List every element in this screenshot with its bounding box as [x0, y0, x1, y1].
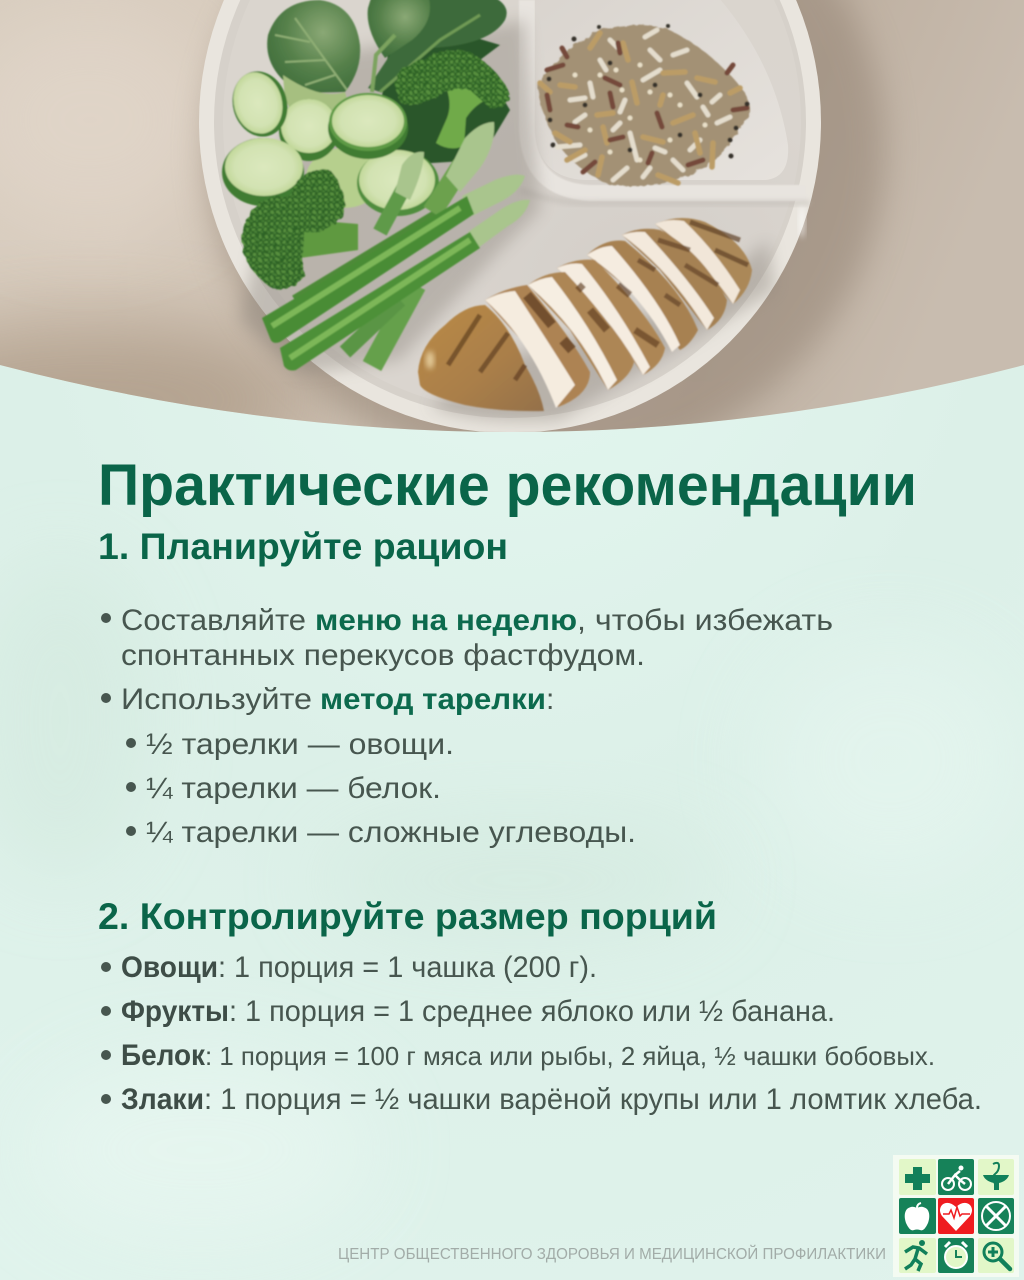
title: Практические рекомендации — [98, 453, 917, 518]
bullet: weekly menu: меню на неделю — [315, 604, 577, 637]
icon: cyclist — [938, 1159, 974, 1195]
icon: magnifier — [978, 1238, 1014, 1273]
logo: health icon grid — [893, 1155, 1019, 1277]
bullet: grains: : 1 порция = ½ чашки варёной крупы или 1 ломтик хлеба. — [204, 1083, 982, 1116]
bullet: fruit: Фрукты — [121, 995, 229, 1028]
photo: plate with food on a table — [0, 0, 1024, 432]
food shadows — [240, 20, 775, 421]
bullet: protein: : 1 порция = 100 г мяса или рыбы, 2 яйца, ½ чашки бобовых. — [205, 1041, 935, 1071]
grilled chicken — [418, 218, 752, 411]
slice 6 — [655, 218, 752, 304]
bullet: weekly menu: спонтанных перекусов фастфудом. — [121, 639, 645, 672]
bullet: weekly menu: Составляйте — [121, 604, 306, 637]
bullet: weekly menu — [101, 604, 833, 672]
slice 2 — [528, 272, 634, 390]
broccoli: lower — [242, 169, 358, 289]
icon: apple — [899, 1198, 936, 1234]
vegetables — [222, 0, 530, 370]
broccoli: upper — [395, 50, 510, 148]
icon: medical cross — [899, 1159, 936, 1195]
bullet: vegetables: : 1 порция = 1 чашка (200 г). — [218, 951, 597, 984]
bullet: plate method: метод тарелки — [320, 683, 546, 716]
sub-bullet: quarter protein: ¼ тарелки — белок. — [146, 772, 441, 805]
bullet: grains: Злаки — [121, 1083, 204, 1116]
spear tips — [395, 122, 530, 248]
footer: organization name: ЦЕНТР ОБЩЕСТВЕННОГО ЗДОРОВЬЯ И МЕДИЦИНСКОЙ ПРОФИЛАКТИКИ — [338, 1244, 886, 1263]
table top — [0, 0, 1024, 432]
bullet: vegetables: Овощи — [121, 951, 218, 984]
asparagus — [262, 122, 530, 370]
heading: plan your diet: 1. Планируйте рацион — [98, 526, 508, 567]
slice 5 — [622, 229, 727, 330]
rice and quinoa — [537, 24, 750, 186]
bullet: fruit: : 1 порция = 1 среднее яблоко или ½ банана. — [229, 995, 835, 1028]
cucumbers — [222, 65, 439, 216]
quinoa specks — [572, 62, 708, 162]
bullet list: portion sizes — [101, 951, 982, 1116]
bullet list: menu and plate method — [101, 604, 833, 849]
red rice grains — [547, 43, 747, 172]
slice 4 — [587, 241, 698, 352]
icon: bowl of hygieia — [978, 1159, 1014, 1195]
bullet: plate method: : — [546, 683, 554, 716]
pale rice grains — [557, 30, 730, 180]
heel piece — [418, 305, 544, 411]
icon: runner — [899, 1238, 936, 1273]
plate shadow — [205, 0, 885, 470]
sub-bullet: half vegetables: ½ тарелки — овощи. — [146, 728, 454, 761]
bullet: weekly menu: , чтобы избежать — [577, 604, 833, 637]
spinach leaves — [267, 0, 510, 165]
slice 3 — [557, 260, 665, 375]
bullet: protein: Белок — [121, 1039, 206, 1072]
slice 1 — [485, 285, 590, 408]
icon: alarm clock — [938, 1238, 974, 1273]
icon: no smoking — [978, 1198, 1014, 1234]
sub-bullet: quarter carbs: ¼ тарелки — сложные углеводы. — [146, 816, 636, 849]
heading: control portions: 2. Контролируйте размер порций — [98, 896, 717, 937]
bullet: plate method — [101, 683, 554, 716]
plate — [199, 0, 821, 433]
back spears — [296, 165, 462, 366]
icon: heart with pulse — [938, 1198, 974, 1234]
front spears — [262, 196, 474, 343]
tan rice grains — [540, 33, 740, 183]
bullet: plate method: Используйте — [121, 683, 312, 716]
